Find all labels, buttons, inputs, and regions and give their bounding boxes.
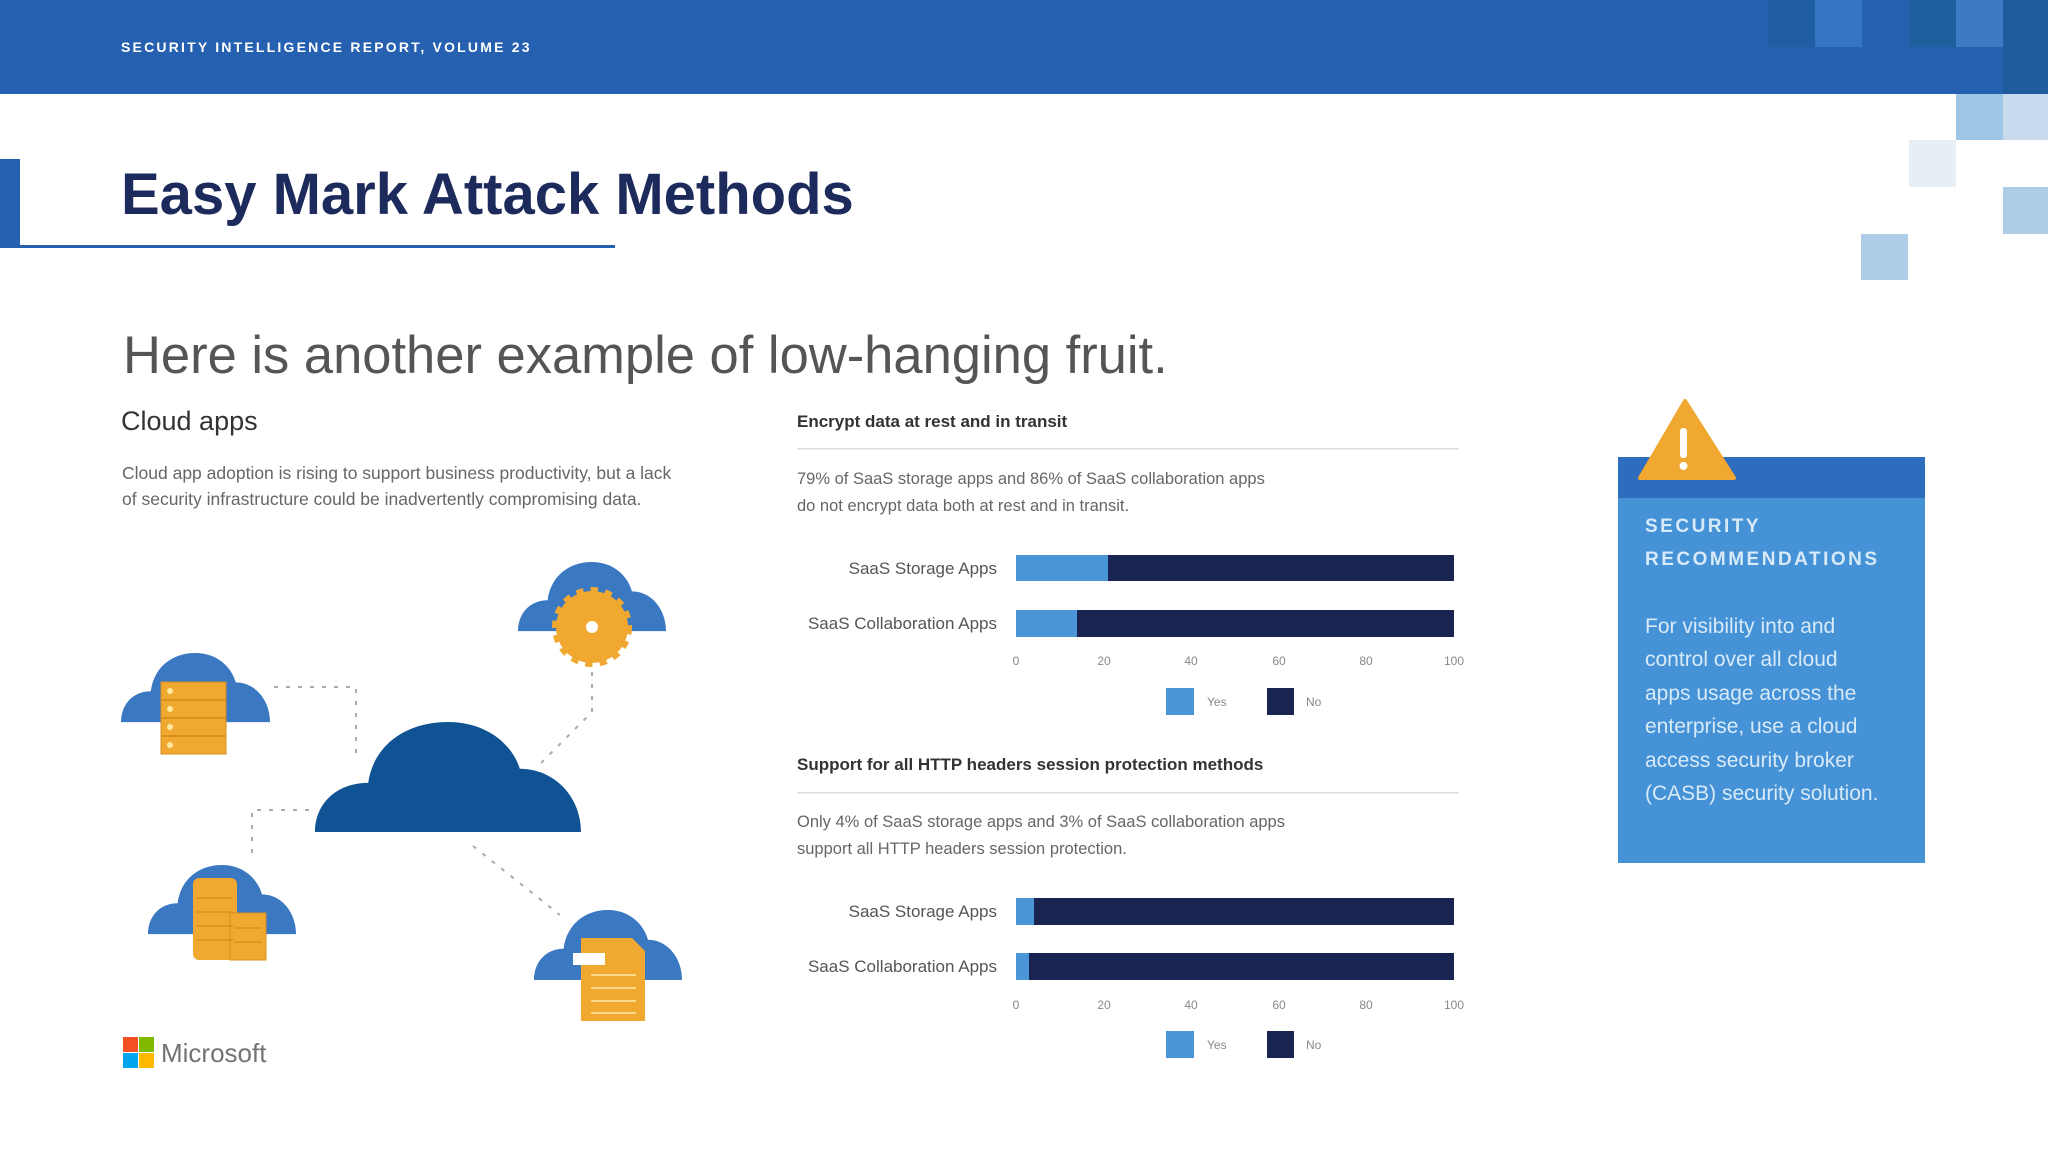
panel: security recommendations: enterprise, use a cloud xyxy=(1645,715,1857,738)
chart 2: http headers: SaaS Storage Apps xyxy=(849,902,997,921)
chart 1: encrypt data xyxy=(797,412,1464,715)
chart 2: http headers: support all HTTP headers session protection. xyxy=(797,840,1127,858)
panel: security recommendations: (CASB) security solution. xyxy=(1645,782,1878,805)
icon: warning triangle xyxy=(1640,401,1734,478)
chart 1: encrypt data: 79% of SaaS storage apps and 86% of SaaS collaboration apps xyxy=(797,470,1265,488)
chart 2: http headers: 100 xyxy=(1444,998,1464,1012)
panel: security recommendations: RECOMMENDATIONS xyxy=(1645,549,1880,570)
chart 1: encrypt data: SaaS Storage Apps xyxy=(849,559,997,578)
chart 2: http headers: 40 xyxy=(1184,998,1198,1012)
chart 1: encrypt data: Yes xyxy=(1207,695,1227,709)
chart 1: encrypt data: SaaS Collaboration Apps xyxy=(808,614,997,633)
cloud apps heading: Cloud apps xyxy=(121,406,258,436)
chart 1: encrypt data: do not encrypt data both at rest and in transit. xyxy=(797,497,1129,515)
header bar xyxy=(0,0,2048,94)
chart 1: encrypt data: 0 xyxy=(1013,654,1020,668)
cloud network illustration xyxy=(121,562,682,1021)
panel: security recommendations: apps usage across the xyxy=(1645,682,1856,705)
panel: security recommendations: For visibility into and xyxy=(1645,615,1835,638)
chart 2: http headers: 60 xyxy=(1272,998,1286,1012)
chart 2: http headers: Support for all HTTP headers session protection methods xyxy=(797,755,1263,774)
chart 1: encrypt data: 40 xyxy=(1184,654,1198,668)
chart 1: encrypt data: 80 xyxy=(1359,654,1373,668)
chart 1: encrypt data: 100 xyxy=(1444,654,1464,668)
title: Easy Mark Attack Methods xyxy=(121,162,854,227)
microsoft logo: Microsoft xyxy=(161,1038,267,1068)
panel: security recommendations xyxy=(1618,401,1925,863)
decorative squares xyxy=(1861,94,2048,280)
chart 2: http headers xyxy=(797,755,1464,1058)
icon: central cloud xyxy=(315,722,581,832)
chart 2: http headers: 0 xyxy=(1013,998,1020,1012)
subtitle: Here is another example of low-hanging fruit. xyxy=(123,326,1168,385)
icon: gear cloud xyxy=(518,562,666,663)
chart 2: http headers: Yes xyxy=(1207,1038,1227,1052)
icon: server cloud xyxy=(121,653,270,754)
cloud apps description: Cloud app adoption is rising to support business productivity, but a lack xyxy=(122,463,672,483)
dashed connectors xyxy=(252,672,592,915)
chart 2: http headers: 80 xyxy=(1359,998,1373,1012)
chart 2: http headers: Only 4% of SaaS storage apps and 3% of SaaS collaboration apps xyxy=(797,813,1285,831)
chart 1: encrypt data: Encrypt data at rest and in transit xyxy=(797,412,1068,431)
panel: security recommendations: control over all cloud xyxy=(1645,648,1838,671)
chart 2: http headers: 20 xyxy=(1097,998,1111,1012)
icon: document cloud xyxy=(534,910,682,1021)
panel: security recommendations: SECURITY xyxy=(1645,516,1761,537)
chart 2: http headers: No xyxy=(1306,1038,1322,1052)
panel: security recommendations: access security broker xyxy=(1645,749,1854,772)
header bar: SECURITY INTELLIGENCE REPORT, VOLUME 23 xyxy=(121,39,532,55)
chart 1: encrypt data: 60 xyxy=(1272,654,1286,668)
cloud apps description: of security infrastructure could be inadvertently compromising data. xyxy=(122,489,641,509)
chart 1: encrypt data: 20 xyxy=(1097,654,1111,668)
icon: building cloud xyxy=(148,865,296,960)
chart 2: http headers: SaaS Collaboration Apps xyxy=(808,957,997,976)
cloud apps description xyxy=(122,463,672,509)
chart 1: encrypt data: No xyxy=(1306,695,1322,709)
title xyxy=(0,159,854,248)
